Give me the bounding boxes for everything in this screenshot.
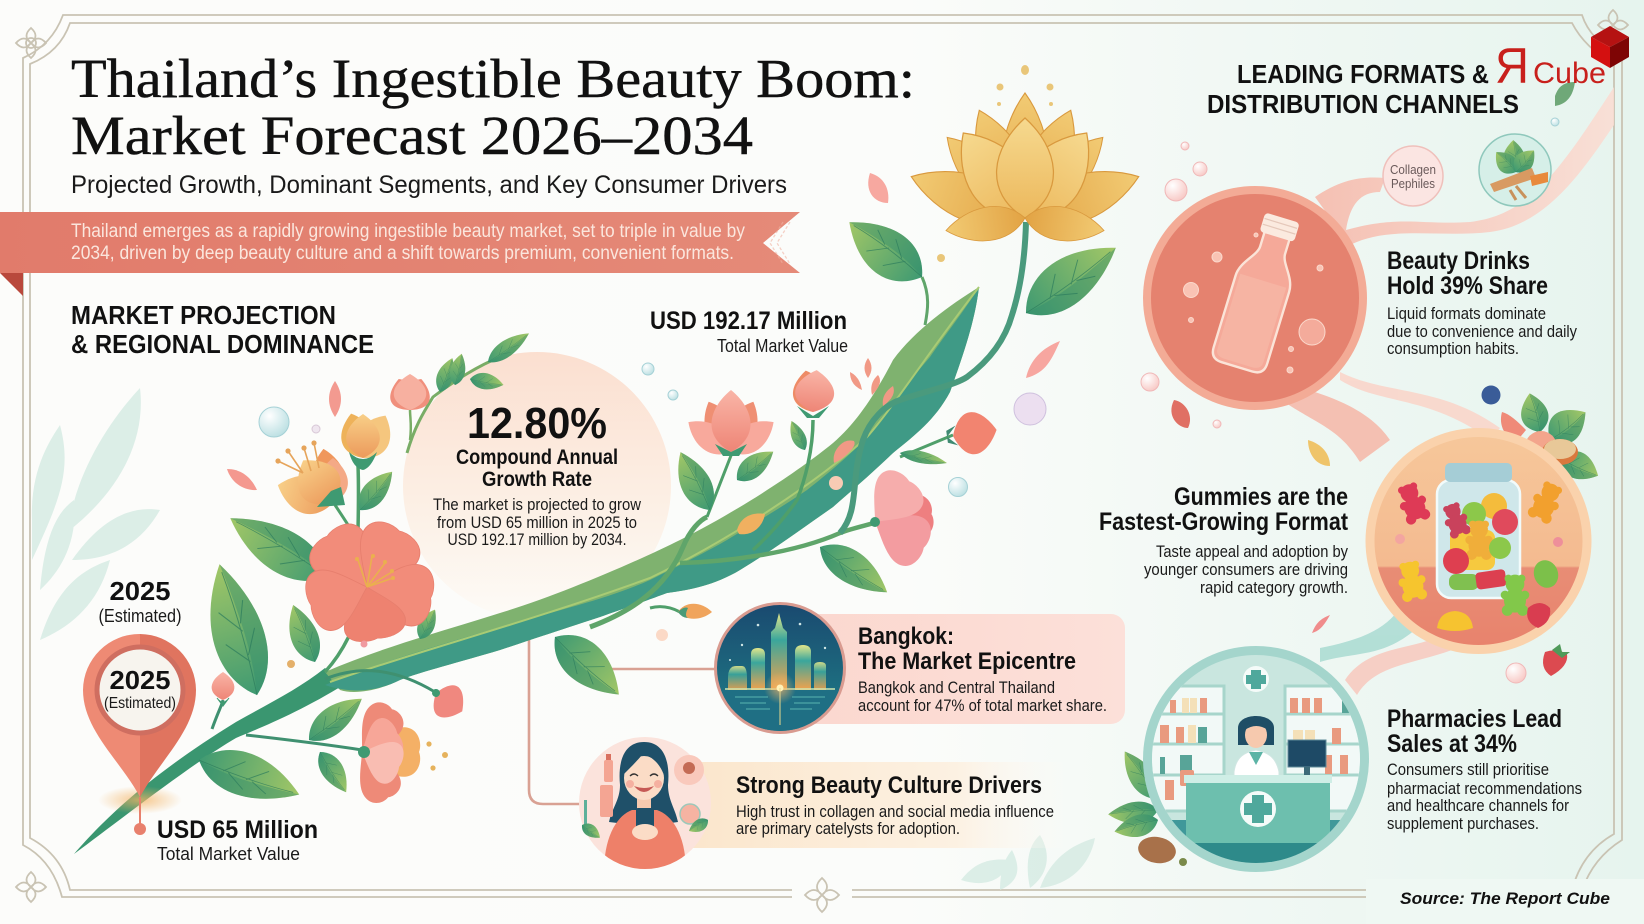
icon: gummies jar — [1366, 428, 1592, 654]
section heading: market projection — [71, 300, 374, 359]
CAGR text: 12.80% — [467, 399, 607, 448]
golden lotus — [835, 65, 1147, 331]
growth stem and big leaf — [74, 222, 1026, 854]
card: Bangkok: The Market Epicentre — [858, 648, 1076, 675]
text: gummies: Taste appeal and adoption by — [1156, 542, 1348, 561]
2025 label: 2025 — [110, 576, 170, 606]
bubble: collagen peptides: Collagen — [1390, 163, 1436, 177]
text: beauty drinks: Liquid formats dominate — [1387, 304, 1546, 323]
text: pharmacies: pharmaciat recommendations — [1387, 779, 1582, 798]
text: pharmacies: supplement purchases. — [1387, 814, 1539, 833]
text: pharmacies: Consumers still prioritise — [1387, 760, 1549, 779]
title — [71, 48, 915, 166]
section heading: leading formats: LEADING FORMATS & — [1237, 59, 1489, 89]
source box — [1366, 879, 1644, 924]
text: beauty drinks: Hold 39% Share — [1387, 272, 1548, 300]
icon: city skyline — [714, 602, 846, 735]
text: beauty drinks: Beauty Drinks — [1387, 247, 1530, 275]
card: Bangkok — [714, 602, 1125, 735]
pale background leaves — [32, 388, 1095, 890]
text: pharmacies: Pharmacies Lead — [1387, 705, 1562, 733]
text: beauty drinks — [1387, 247, 1577, 358]
section heading: market projection: & REGIONAL DOMINANCE — [71, 329, 374, 359]
start value label: Total Market Value — [157, 844, 300, 864]
text: pharmacies: Sales at 34% — [1387, 730, 1517, 758]
end value label — [650, 307, 848, 356]
CAGR text: Compound Annual — [456, 446, 618, 469]
ribbon banner — [0, 212, 800, 296]
bubble: collagen peptides: Pephiles — [1391, 177, 1435, 191]
map pin 2025 — [83, 634, 196, 835]
map pin 2025: 2025 — [110, 665, 170, 695]
start value label — [157, 816, 318, 864]
section heading: market projection: MARKET PROJECTION — [71, 300, 336, 330]
ribbon banner: Thailand emerges as a rapidly growing ingestible beauty market, set to triple in value by — [71, 221, 745, 242]
fruit garnish — [1501, 390, 1604, 487]
floating petals and bubbles — [227, 82, 1575, 683]
card: beauty culture drivers: are primary catelysts for adoption. — [736, 819, 960, 838]
connector lines — [529, 634, 716, 804]
text: pharmacies — [1387, 705, 1582, 833]
2025 label — [98, 576, 182, 626]
text: gummies: rapid category growth. — [1200, 578, 1348, 597]
source box: Source: The Report Cube — [1400, 889, 1610, 908]
section heading: leading formats — [1207, 59, 1519, 119]
logo: R Cube — [1495, 26, 1629, 94]
title: Thailand’s Ingestible Beauty Boom: — [71, 48, 915, 109]
CAGR text: USD 192.17 million by 2034. — [448, 531, 626, 549]
logo: R Cube: Cube — [1533, 57, 1606, 90]
herbs and walnut near pharmacy — [1107, 745, 1187, 866]
CAGR text: The market is projected to grow — [433, 496, 641, 514]
text: beauty drinks: due to convenience and daily — [1387, 322, 1577, 341]
icon: beauty drink bottle — [1143, 186, 1367, 410]
card: beauty culture drivers: Strong Beauty Culture Drivers — [736, 772, 1042, 799]
section heading: leading formats: DISTRIBUTION CHANNELS — [1207, 89, 1519, 119]
card: Bangkok: Bangkok and Central Thailand — [858, 678, 1055, 697]
2025 label: (Estimated) — [98, 606, 182, 626]
CAGR text: Growth Rate — [482, 468, 592, 491]
text: gummies: Fastest-Growing Format — [1099, 508, 1349, 536]
ribbon banner: 2034, driven by deep beauty culture and a shift towards premium, convenient formats. — [71, 243, 734, 264]
text: pharmacies: and healthcare channels for — [1387, 796, 1569, 815]
map pin 2025: (Estimated) — [104, 695, 176, 712]
bubble: herbal root — [1479, 134, 1551, 206]
card: Bangkok: Bangkok: — [858, 623, 954, 650]
CAGR text — [433, 399, 641, 549]
middle flowers — [542, 358, 1000, 709]
text: gummies: Gummies are the — [1174, 483, 1348, 511]
text: beauty drinks: consumption habits. — [1387, 339, 1519, 358]
text: gummies — [1099, 483, 1349, 597]
card: beauty culture drivers: High trust in collagen and social media influence — [736, 802, 1054, 821]
card: Bangkok: account for 47% of total market share. — [858, 696, 1107, 715]
subtitle: Projected Growth, Dominant Segments, and Key Consumer Drivers — [71, 171, 787, 199]
CAGR text: from USD 65 million in 2025 to — [437, 514, 637, 532]
logo: R Cube: Я — [1495, 38, 1529, 94]
right side flowing ribbons — [1289, 87, 1614, 695]
title: Market Forecast 2026–2034 — [71, 105, 753, 166]
bubble: collagen peptides — [1383, 146, 1443, 206]
text: gummies: younger consumers are driving — [1144, 560, 1348, 579]
start value label: USD 65 Million — [157, 816, 318, 844]
icon: woman with phone — [579, 737, 711, 872]
icon: pharmacy counter — [1140, 646, 1372, 873]
end value label: Total Market Value — [717, 336, 848, 356]
left flower cluster — [192, 326, 533, 814]
strawberry — [1543, 644, 1570, 676]
orange bud — [678, 604, 712, 619]
CAGR circle background — [403, 352, 671, 620]
card: beauty culture drivers — [579, 737, 1070, 872]
end value label: USD 192.17 Million — [650, 307, 847, 335]
